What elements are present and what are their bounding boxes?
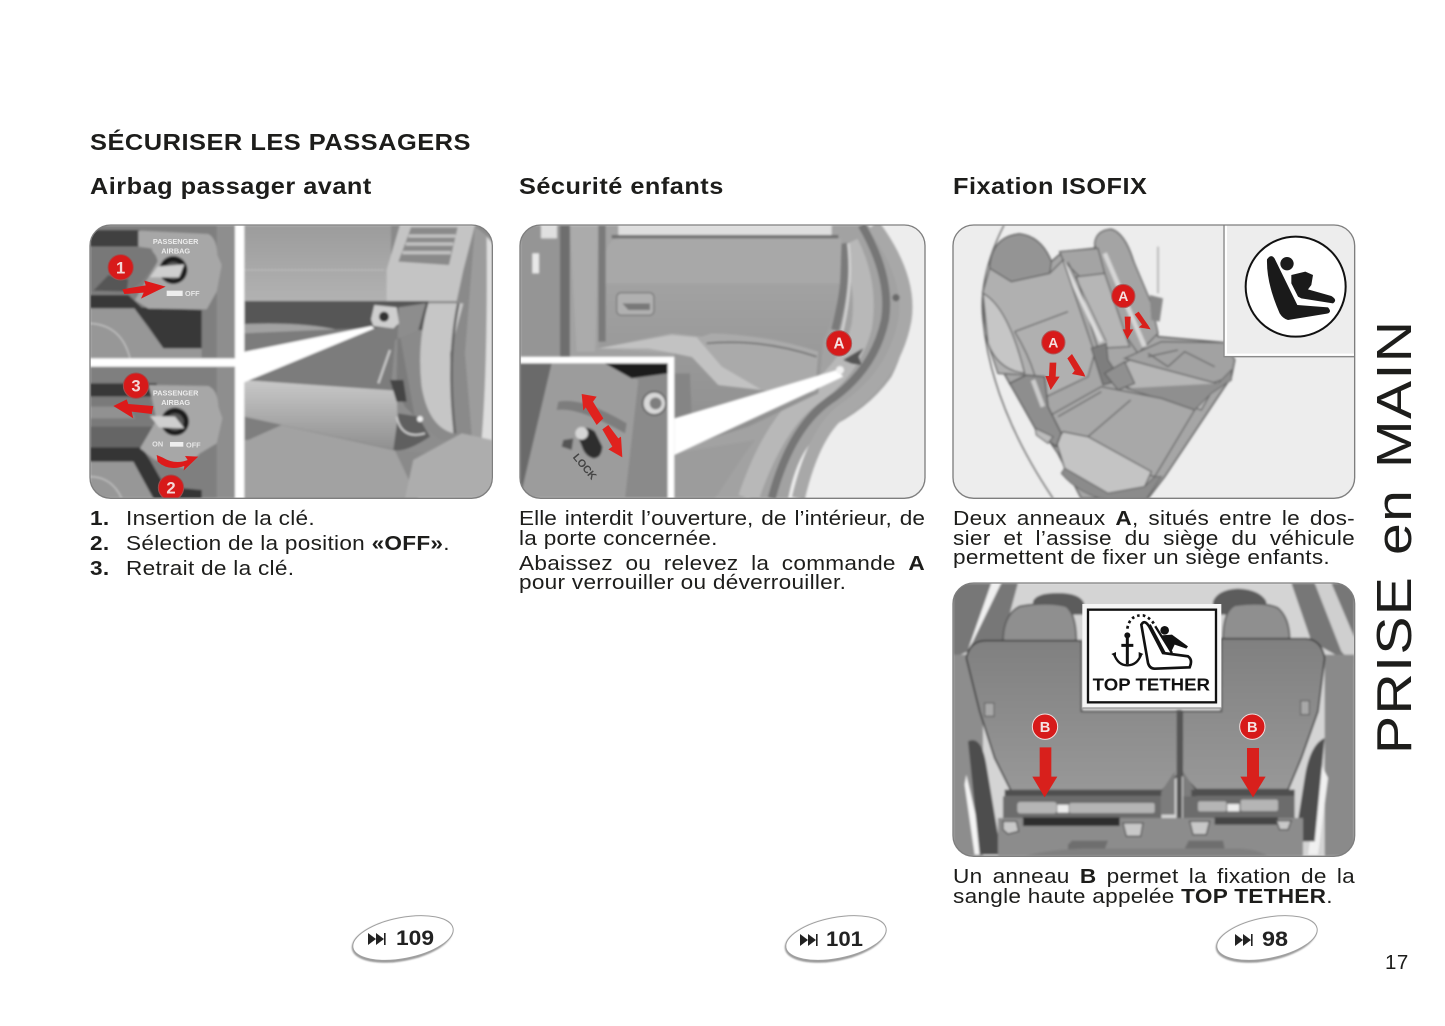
- title: SÉCURISER LES PASSAGERS: [90, 129, 471, 155]
- heading: child safety: Sécurité enfants: [519, 173, 724, 199]
- photo panel: top tether: [953, 583, 1355, 856]
- far seat cushion: [1125, 342, 1235, 383]
- side bolsters: [968, 740, 1001, 855]
- text block: isofix description: permettent de fixer un siège enfants.: [953, 547, 1330, 569]
- text block: isofix description: sier et l’assise du siège du véhicule: [953, 528, 1355, 550]
- door handle: [617, 293, 654, 315]
- text block: child safety description: Elle interdit l’ouverture, de l’intérieur, de: [519, 508, 925, 530]
- text block: airbag steps: Retrait de la clé.: [126, 558, 294, 580]
- section tab: PRISE en MAIN: PRISE en MAIN: [1368, 320, 1422, 754]
- lock label: LOCK: [570, 452, 599, 483]
- isofix inset: [1224, 225, 1356, 357]
- badges B: [1032, 714, 1265, 739]
- badges B: B: [1040, 720, 1050, 736]
- badges A: [1042, 284, 1135, 354]
- switch labels: AIRBAG: [161, 398, 190, 407]
- page reference bubble 101: [781, 908, 890, 970]
- whole bench silhouette: [983, 229, 1235, 498]
- icon: isofix child seat: [1246, 237, 1346, 337]
- badges A: A: [1118, 288, 1128, 304]
- door exterior background: [788, 225, 925, 498]
- switch labels: [152, 237, 201, 450]
- page number: 17: [1385, 951, 1409, 974]
- side pillars: [953, 583, 1018, 658]
- red tether arrows: [1032, 747, 1266, 797]
- door outline strokes: [982, 225, 1053, 498]
- inset: child lock control: [520, 348, 863, 500]
- centre console: [1090, 342, 1114, 386]
- white separators and callout beam: [90, 225, 374, 500]
- switch labels: ON: [152, 440, 163, 449]
- left pillar: [520, 225, 560, 358]
- page reference bubble 109: [348, 908, 457, 970]
- near cushion: [1048, 387, 1195, 477]
- badge A: A: [833, 336, 845, 353]
- near back: [983, 260, 1095, 397]
- inset top: key insertion: [90, 225, 235, 358]
- page reference bubble 109: 109: [396, 927, 434, 950]
- text block: child safety description: [519, 508, 925, 594]
- photo panel: door child lock: [520, 225, 925, 500]
- sign label: TOP TETHER: [1093, 674, 1211, 694]
- switch labels: AIRBAG: [161, 246, 190, 255]
- near side trim: [1010, 375, 1061, 447]
- switch labels: PASSENGER: [153, 389, 199, 398]
- page reference bubble 98: 98: [1262, 928, 1288, 951]
- badges A: A: [1048, 334, 1058, 350]
- red isofix arrows: [1045, 312, 1151, 390]
- heading: airbag: Airbag passager avant: [90, 173, 372, 199]
- right view: glove box: [244, 225, 492, 500]
- centre mounts: [1161, 771, 1175, 815]
- text block: airbag steps: 2.: [90, 533, 109, 555]
- text block: child safety description: pour verrouiller ou déverrouiller.: [519, 572, 846, 594]
- text block: top tether description: sangle haute appelée TOP TETHER.: [953, 886, 1333, 908]
- number badges: 2: [166, 479, 176, 498]
- number badges: 1: [116, 258, 125, 277]
- text block: top tether description: [953, 866, 1355, 908]
- inset bottom: key removal: [90, 367, 235, 498]
- text block: airbag steps: Sélection de la position «OFF».: [126, 533, 450, 555]
- door trim: [618, 225, 832, 235]
- text block: airbag steps: 1.: [90, 508, 109, 530]
- floor anchor points: [1003, 821, 1291, 836]
- far seat: [1095, 229, 1158, 353]
- near headrest: [990, 234, 1051, 282]
- photo panel: airbag passager: [90, 225, 492, 500]
- seat backs: [966, 641, 1178, 791]
- icon: anchor and child seat: [1111, 615, 1191, 669]
- text block: airbag steps: Insertion de la clé.: [126, 508, 315, 530]
- page reference bubble 98: [1212, 908, 1321, 970]
- text block: airbag steps: [90, 508, 450, 580]
- text block: airbag steps: 3.: [90, 558, 109, 580]
- page reference bubble 101: 101: [826, 928, 863, 951]
- photo panel: ISOFIX seat: [953, 225, 1356, 502]
- armrest: [697, 334, 818, 392]
- badges B: B: [1247, 720, 1258, 736]
- floor and bars: [1005, 790, 1161, 796]
- red lock arrows: [582, 394, 622, 457]
- top tether sign: [1082, 604, 1221, 709]
- number badges: [108, 255, 184, 500]
- text block: top tether description: Un anneau B permet la fixation de la: [953, 866, 1355, 888]
- heading: isofix: Fixation ISOFIX: [953, 173, 1147, 199]
- rear headrests: [1033, 593, 1084, 615]
- airbag switch detail: [371, 305, 399, 328]
- switch labels: PASSENGER: [153, 237, 199, 246]
- text block: isofix description: [953, 508, 1355, 569]
- switch labels: OFF: [185, 289, 200, 298]
- door frame bands: [748, 225, 906, 498]
- text block: isofix description: Deux anneaux A, situés entre le dos-: [953, 508, 1355, 530]
- number badges: 3: [131, 377, 141, 396]
- text block: child safety description: Abaissez ou relevez la commande A: [519, 552, 925, 574]
- text block: child safety description: la porte concernée.: [519, 528, 718, 550]
- switch labels: OFF: [186, 441, 201, 450]
- badge A: [826, 331, 852, 356]
- red arrows: [113, 281, 198, 471]
